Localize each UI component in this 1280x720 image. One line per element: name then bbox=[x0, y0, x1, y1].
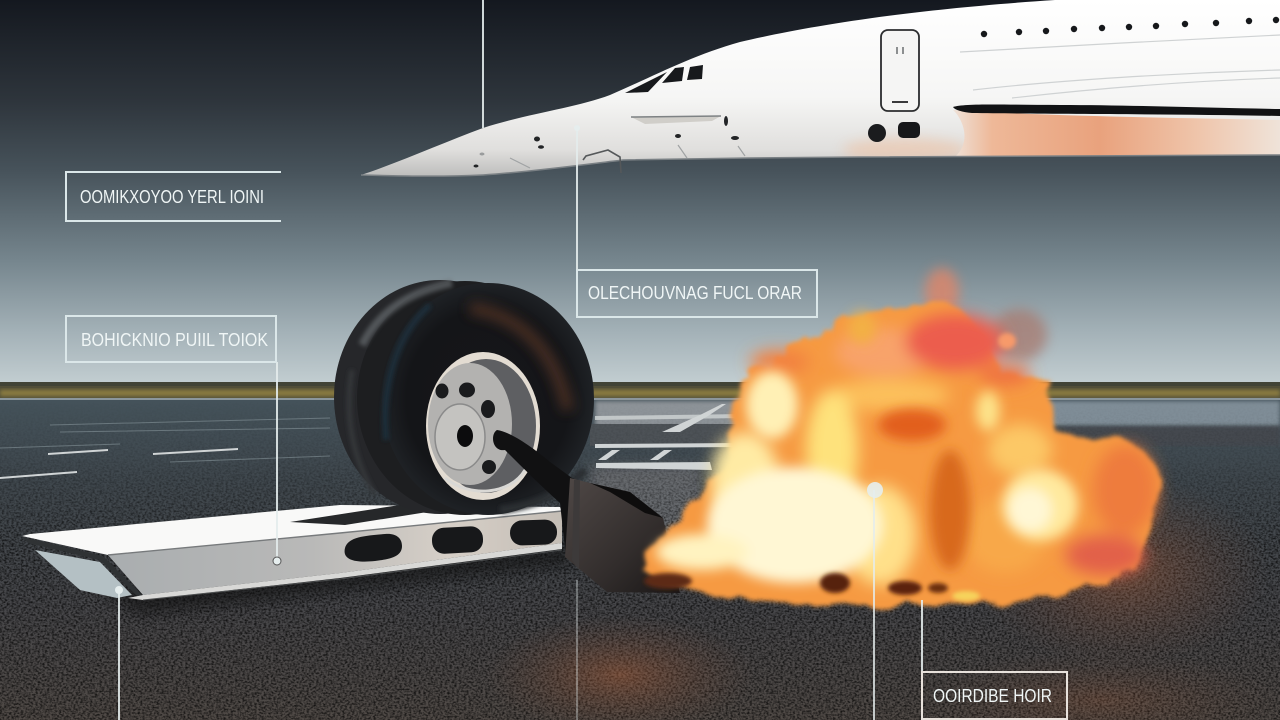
callout: mid left label: BOHICKNIO PUIIL TOIOK bbox=[81, 330, 268, 350]
callout: top left label bbox=[66, 172, 281, 221]
tread bbox=[334, 280, 546, 514]
callout: mid left label bbox=[66, 316, 276, 362]
smoke plume bbox=[991, 309, 1047, 361]
black support arm bbox=[493, 430, 680, 593]
callout: centre label bbox=[577, 270, 817, 317]
aircraft bbox=[361, 0, 1280, 176]
strut shadow bbox=[100, 545, 575, 615]
fuselage bbox=[361, 0, 1280, 176]
tyre contact shadow bbox=[290, 505, 440, 525]
callout: bottom right label: OOIRDIBE HOIR bbox=[933, 686, 1052, 706]
vents bbox=[868, 124, 886, 142]
callout: centre label: OLECHOUVNAG FUCL ORAR bbox=[588, 283, 802, 303]
runway surface bbox=[0, 400, 1280, 720]
strut wedge bbox=[35, 550, 132, 598]
blurred flame colour regions bbox=[711, 314, 1157, 585]
hatch on nose bbox=[631, 116, 721, 124]
wing lines bbox=[960, 35, 1280, 98]
strut side face bbox=[108, 511, 562, 595]
left strut assembly bbox=[22, 505, 575, 615]
sky background bbox=[0, 0, 1280, 390]
wheel hub bbox=[426, 352, 540, 500]
callout: bottom right label bbox=[922, 672, 1067, 719]
strut cut-outs bbox=[345, 519, 557, 562]
cockpit windows bbox=[625, 65, 703, 93]
panel marks bbox=[474, 116, 739, 168]
strut top surface bbox=[22, 505, 562, 555]
horizon strip bbox=[0, 382, 1280, 400]
orange reflection on belly bbox=[842, 110, 1280, 156]
door bbox=[881, 30, 919, 111]
tyre face bbox=[382, 283, 594, 515]
tyre and wheel bbox=[334, 280, 680, 593]
wing leading edge bbox=[953, 104, 1280, 116]
callout lines and dots bbox=[119, 0, 922, 720]
charred debris bbox=[644, 573, 980, 601]
fireball bbox=[643, 268, 1161, 605]
runway markings bbox=[0, 404, 745, 479]
lighter far runway centre and right bbox=[595, 401, 765, 427]
fire silhouette bbox=[643, 302, 1161, 605]
callout: top left label: OOMIKXOYOO YERL IOINI bbox=[80, 187, 264, 207]
cabin windows bbox=[981, 17, 1279, 37]
belly edge bbox=[361, 155, 1280, 176]
